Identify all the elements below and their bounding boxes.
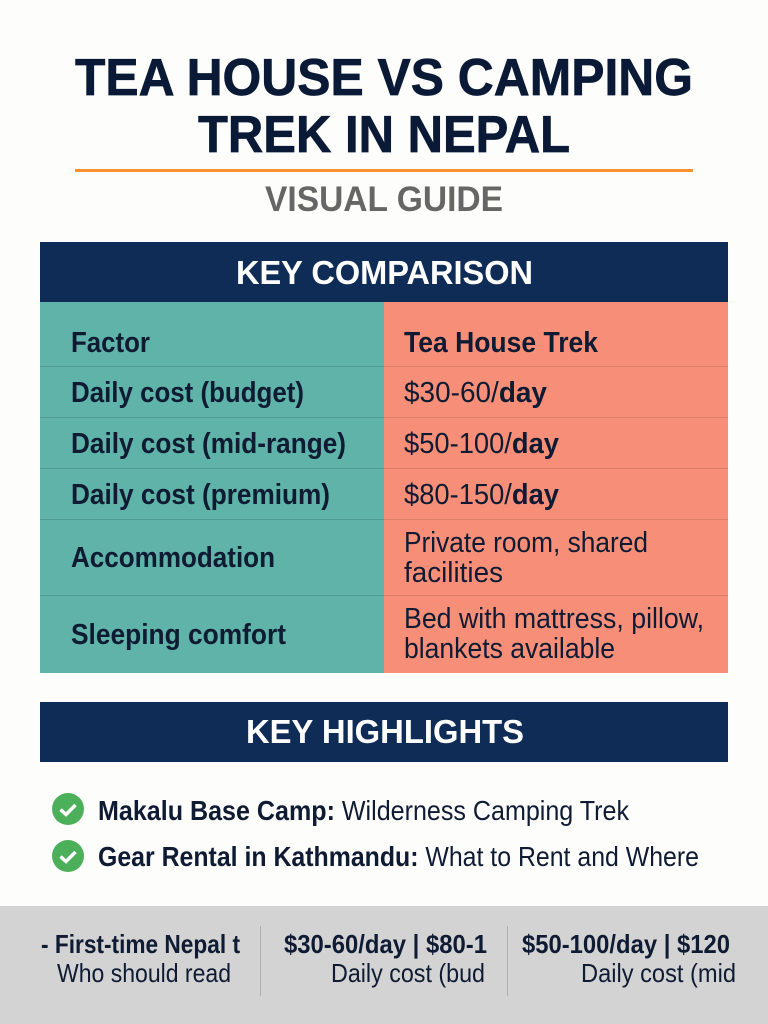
title xyxy=(75,49,693,164)
highlight: gear rental: Gear Rental in Kathmandu: What to Rent and Where xyxy=(98,841,699,872)
highlight: makalu base camp: Makalu Base Camp: Wilderness Camping Trek xyxy=(98,795,630,826)
table column: tea house trek: $50-100/day xyxy=(404,428,559,460)
table column: factor: Daily cost (premium) xyxy=(71,479,330,511)
stat: daily cost budget xyxy=(284,929,487,988)
heading: key comparison: KEY COMPARISON xyxy=(236,254,533,291)
table column: tea house trek: facilities xyxy=(404,557,503,589)
stat: who should read xyxy=(41,929,240,988)
title underline xyxy=(75,169,693,172)
stat: who should read: - First-time Nepal t xyxy=(41,929,240,959)
stat: daily cost mid-range xyxy=(522,929,736,988)
stat: daily cost budget: Daily cost (bud xyxy=(331,958,485,988)
stat: who should read: Who should read xyxy=(57,958,231,988)
table column: tea house trek: blankets available xyxy=(404,633,615,665)
table column: tea house trek: Private room, shared xyxy=(404,527,648,559)
icon: check xyxy=(52,840,84,872)
table column: factor: Daily cost (mid-range) xyxy=(71,428,346,460)
stat: daily cost budget: $30-60/day | $80-1 xyxy=(284,929,487,959)
table column: tea house trek: $80-150/day xyxy=(404,479,559,511)
icon: check xyxy=(52,793,84,825)
heading: key highlights: KEY HIGHLIGHTS xyxy=(246,713,524,750)
table column: tea house trek xyxy=(384,302,728,673)
table column: factor: Accommodation xyxy=(71,542,275,574)
footer stats bar xyxy=(0,906,768,1024)
table column: tea house trek: Tea House Trek xyxy=(404,327,599,359)
table column: factor: Factor xyxy=(71,327,150,359)
panel: key comparison xyxy=(40,242,728,673)
table column: factor: Daily cost (budget) xyxy=(71,377,304,409)
table column: factor xyxy=(40,302,384,673)
title: TEA HOUSE VS CAMPING xyxy=(75,49,693,107)
table column: tea house trek: $30-60/day xyxy=(404,377,547,409)
stat: daily cost mid-range: Daily cost (mid xyxy=(581,958,736,988)
table column: tea house trek: Bed with mattress, pillow, xyxy=(404,603,704,635)
title: TREK IN NEPAL xyxy=(198,106,570,164)
table column: factor: Sleeping comfort xyxy=(71,619,286,651)
heading: key highlights xyxy=(40,702,728,762)
stat: daily cost mid-range: $50-100/day | $120 xyxy=(522,929,730,959)
subtitle: VISUAL GUIDE xyxy=(265,180,503,219)
heading: key comparison xyxy=(40,242,728,302)
